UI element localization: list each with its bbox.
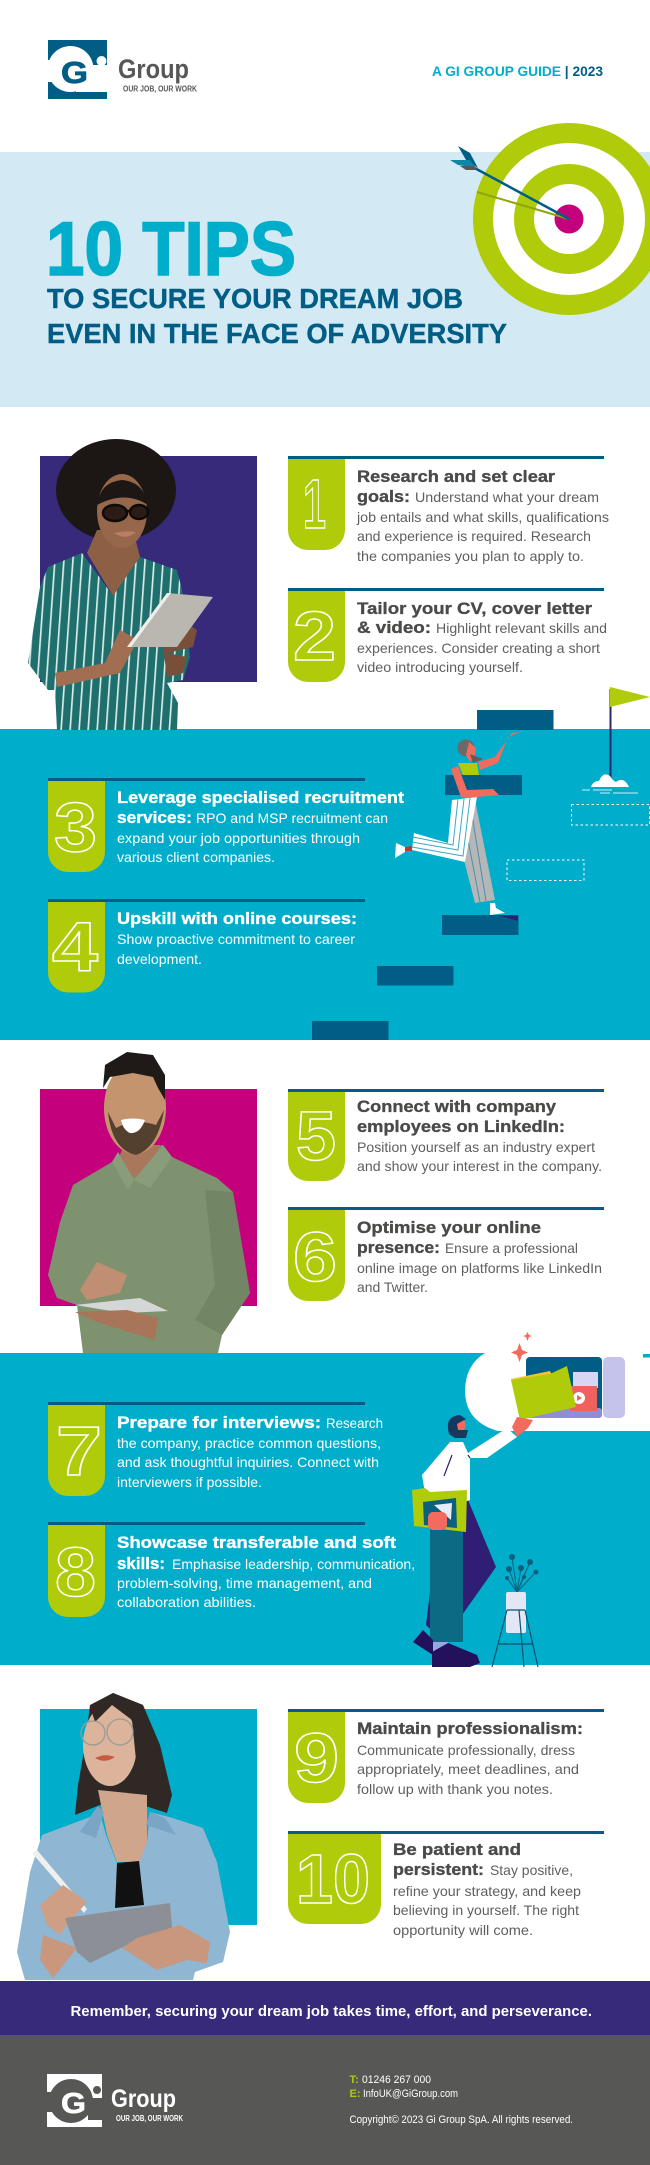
climbing woman figure [395, 732, 520, 921]
tip 8 [48, 1522, 415, 1617]
tip 7 text: Research [326, 1415, 383, 1431]
tip 9 text: follow up with thank you notes. [357, 1781, 553, 1797]
tip 1 text [356, 467, 609, 564]
tip 10 text: persistent: [393, 1860, 484, 1879]
tip 1 number badge: 1 [303, 465, 326, 543]
tip 3 number badge: 3 [54, 788, 97, 866]
tip 9 [288, 1709, 604, 1803]
title: 10 TIPS [46, 207, 296, 292]
tip 10 text [393, 1840, 581, 1938]
tip 10 [288, 1831, 604, 1938]
tip 7 rule [48, 1402, 365, 1405]
closing banner: Remember, securing your dream job takes time, effort, and perseverance. [70, 2003, 592, 2020]
tip 1 [288, 456, 609, 564]
tip 7 number badge: 7 [56, 1412, 102, 1490]
tip 5 number badge: 5 [296, 1097, 336, 1175]
tip 6 number badge: 6 [293, 1218, 337, 1296]
tip 10 text: Stay positive, [490, 1862, 573, 1878]
panel: teal photo backdrop [40, 1709, 257, 1925]
tip 3 text: various client companies. [117, 849, 275, 865]
footer contact details [350, 2074, 573, 2126]
tip 9 text: Communicate professionally, dress [357, 1742, 575, 1758]
tip 7 text: interviewers if possible. [117, 1474, 262, 1490]
tip 6 text: presence: [357, 1238, 440, 1257]
closing banner [0, 1981, 650, 2035]
tip 9 number badge [288, 1712, 345, 1803]
title: EVEN IN THE FACE OF ADVERSITY [47, 318, 507, 349]
tip 6 text: Ensure a professional [445, 1240, 578, 1256]
title: TO SECURE YOUR DREAM JOB [47, 283, 463, 314]
tip 2 text: Highlight relevant skills and [436, 620, 607, 636]
photo: woman with glasses and tablet [17, 1693, 230, 1980]
tip 6 [288, 1207, 604, 1301]
footer contact details: InfoUK@GiGroup.com [363, 2088, 458, 2100]
tip 7 number badge [48, 1405, 105, 1496]
tip 3 text: services: [117, 808, 192, 827]
tip 4 text: Show proactive commitment to career [117, 931, 355, 947]
footer contact details: T: [350, 2074, 359, 2086]
tip 7 text [117, 1413, 383, 1490]
tip 10 rule [288, 1831, 604, 1834]
tip 4 number badge: 4 [52, 908, 98, 986]
tip 5 text [357, 1097, 602, 1174]
tip 8 text: collaboration abilities. [117, 1594, 256, 1610]
tip 6 rule [288, 1207, 604, 1210]
tip 1 text: and experience is required. Research [357, 528, 591, 544]
tip 3 text: expand your job opportunities through [117, 830, 360, 846]
tip 1 text: job entails and what skills, qualifications [356, 509, 609, 525]
folder [511, 1366, 576, 1420]
header logo [48, 40, 197, 99]
panel: magenta photo backdrop [40, 1089, 257, 1306]
footer logo: OUR JOB, OUR WORK [116, 2114, 183, 2123]
illustration: man reaching for folder [412, 1332, 650, 1667]
potted plant on stand [492, 1554, 538, 1667]
tip 8 text: problem-solving, time management, and [117, 1575, 372, 1591]
tip 7 text: the company, practice common questions, [117, 1435, 381, 1451]
teal band two [0, 1353, 650, 1665]
flag on cloud [582, 687, 650, 793]
tip 4 text [117, 909, 357, 967]
photo: smiling man with tablet [48, 1052, 250, 1353]
step blocks [312, 710, 554, 1040]
footer logo [47, 2074, 183, 2127]
tip 2 text: Tailor your CV, cover letter [357, 599, 592, 618]
panel: purple photo backdrop [40, 456, 257, 682]
tip 6 text [357, 1218, 602, 1295]
tip 4 text: Upskill with online courses: [117, 909, 357, 928]
tip 2 text: & video: [357, 618, 431, 637]
tip 7 text: and ask thoughtful inquiries. Connect with [117, 1454, 379, 1470]
tip 6 text: online image on platforms like LinkedIn [357, 1260, 602, 1276]
title [46, 207, 507, 349]
glasses [103, 505, 148, 521]
tip 5 text: Position yourself as an industry expert [357, 1139, 595, 1155]
teal band one [0, 729, 650, 1040]
tip 9 text [357, 1719, 583, 1797]
footer contact details: E: [350, 2088, 360, 2100]
footer contact details: Copyright© 2023 Gi Group SpA. All rights reserved. [350, 2114, 573, 2126]
tip 10 text: Be patient and [393, 1840, 521, 1859]
tip 8 text: skills: [117, 1554, 165, 1573]
tip 1 text: Research and set clear [357, 467, 555, 486]
tip 10 number badge: 10 [296, 1840, 370, 1918]
tip 6 text: and Twitter. [357, 1279, 428, 1295]
footer contact details: 01246 267 000 [362, 2074, 431, 2086]
tip 9 rule [288, 1709, 604, 1712]
tip 8 number badge: 8 [55, 1533, 96, 1611]
tip 4 number badge [48, 902, 105, 992]
media window [526, 1357, 625, 1418]
tip 3 text [117, 788, 404, 865]
tip 3 number badge [48, 781, 105, 872]
tip 5 text: employees on LinkedIn: [357, 1117, 565, 1136]
tip 10 text: opportunity will come. [393, 1922, 533, 1938]
tip 4 rule [48, 899, 365, 902]
illustration: climbing steps with flag [312, 687, 650, 1040]
white cloud [465, 1353, 650, 1431]
tip 2 number badge [288, 591, 345, 682]
tip 2 text: video introducing yourself. [357, 659, 523, 675]
footer logo: G [61, 2088, 86, 2120]
tip 5 text: Connect with company [357, 1097, 557, 1116]
tip 8 text: Emphasise leadership, communication, [172, 1556, 415, 1572]
tip 5 [288, 1089, 604, 1181]
tip 2 [288, 588, 607, 682]
tip 8 number badge [48, 1525, 105, 1617]
tip 3 [48, 778, 404, 872]
tip 8 text: Showcase transferable and soft [117, 1533, 396, 1552]
tip 3 text: Leverage specialised recruitment [117, 788, 404, 807]
photo: woman with tablet [28, 439, 213, 730]
tip 1 text: goals: [357, 487, 410, 506]
footer [0, 2035, 650, 2165]
tip 3 rule [48, 778, 365, 781]
tip 5 number badge [288, 1092, 345, 1181]
tip 4 [48, 899, 365, 992]
tip 6 text: Optimise your online [357, 1218, 541, 1237]
tip 8 rule [48, 1522, 365, 1525]
tip 6 number badge [288, 1210, 345, 1301]
tip 3 text: RPO and MSP recruitment can [196, 810, 388, 826]
hero band [0, 152, 650, 407]
header guide label: A GI GROUP GUIDE | 2023 [432, 63, 603, 79]
tip 2 text: experiences. Consider creating a short [357, 640, 600, 656]
tip 9 text: Maintain professionalism: [357, 1719, 583, 1738]
tip 2 text [357, 599, 607, 675]
tip 1 number badge [288, 459, 345, 550]
tip 1 text: the companies you plan to apply to. [357, 548, 584, 564]
tip 2 rule [288, 588, 604, 591]
tip 1 rule [288, 456, 604, 459]
standing man [412, 1415, 533, 1667]
header logo: Group [118, 54, 189, 84]
tip 9 number badge: 9 [294, 1719, 339, 1797]
tip 4 text: development. [117, 951, 202, 967]
icon: target with arrow [450, 123, 650, 315]
tip 7 text: Prepare for interviews: [117, 1413, 321, 1432]
sparkles [511, 1343, 528, 1362]
header logo: G [61, 55, 88, 90]
header logo: OUR JOB, OUR WORK [123, 84, 197, 94]
footer logo: Group [111, 2085, 176, 2113]
tip 2 number badge: 2 [293, 597, 336, 675]
tip 10 text: believing in yourself. The right [393, 1902, 579, 1918]
tip 10 text: refine your strategy, and keep [393, 1883, 581, 1899]
tip 1 text: Understand what your dream [415, 489, 599, 505]
tip 7 [48, 1402, 383, 1496]
tip 9 text: appropriately, meet deadlines, and [357, 1761, 579, 1777]
tip 5 text: and show your interest in the company. [357, 1158, 602, 1174]
tip 8 text [117, 1533, 415, 1610]
dashed step outlines [572, 804, 650, 825]
tip 5 rule [288, 1089, 604, 1092]
